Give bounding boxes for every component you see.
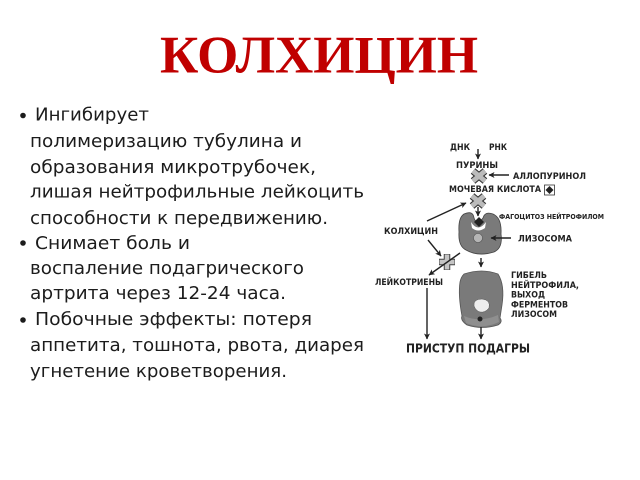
label: allopurinol: АЛЛОПУРИНОЛ bbox=[513, 172, 586, 182]
bullet 3: угнетение кроветворения. bbox=[30, 361, 287, 382]
bullet 2 bbox=[20, 233, 304, 304]
label: neutrophil death: ЛИЗОСОМ bbox=[511, 310, 557, 320]
label: gout attack: ПРИСТУП ПОДАГРЫ bbox=[406, 342, 530, 356]
arrow: colchicine to cross 2 bbox=[427, 203, 466, 221]
label: neutrophil death bbox=[511, 271, 579, 320]
bullet 3: аппетита, тошнота, рвота, диарея bbox=[30, 335, 364, 356]
label: neutrophil phagocytosis: ФАГОЦИТОЗ НЕЙТРОФИЛОМ bbox=[499, 212, 604, 221]
bullet 1: лишая нейтрофильные лейкоцить bbox=[30, 182, 364, 202]
arrow: to neutrophil bbox=[477, 207, 479, 216]
text block: bullet list bbox=[20, 104, 364, 382]
label: DNA, RNA bbox=[450, 143, 508, 153]
arrow: to purines bbox=[477, 149, 479, 159]
bullet 1: образования микротрубочек, bbox=[30, 157, 316, 178]
arrow: leukotrienes to gout attack bbox=[426, 288, 428, 339]
icon: block cross 2 bbox=[472, 196, 484, 206]
label: DNA, RNA: РНК bbox=[489, 143, 508, 153]
icon: block cross 3 bbox=[439, 254, 455, 270]
neutrophil: phagocytosis bbox=[459, 213, 501, 254]
diagram: mechanism of gout attack bbox=[375, 143, 604, 356]
bullet 2: артрита через 12-24 часа. bbox=[30, 283, 286, 304]
bullet 1: полимеризацию тубулина и bbox=[30, 131, 302, 152]
arrow: colchicine to cross 3 bbox=[428, 240, 441, 256]
bullet 2: Снимает боль и bbox=[35, 233, 190, 254]
arrow: death to gout attack bbox=[480, 327, 482, 339]
title: КОЛХИЦИН bbox=[160, 26, 478, 84]
label: leukotrienes: ЛЕЙКОТРИЕНЫ bbox=[375, 276, 443, 288]
arrow: allopurinol bbox=[489, 174, 509, 176]
arrow: neutrophil to death bbox=[480, 258, 482, 267]
bullet 1: Ингибирует bbox=[35, 104, 149, 126]
neutrophil: dying cell bbox=[459, 271, 503, 328]
bullet 3: Побочные эффекты: потеря bbox=[35, 309, 312, 330]
bullet 1 bbox=[20, 104, 364, 229]
label: uric acid: МОЧЕВАЯ КИСЛОТА bbox=[449, 185, 541, 195]
icon: uric acid crystal bbox=[544, 185, 554, 195]
label: neutrophil death: ГИБЕЛЬ bbox=[511, 271, 547, 281]
bullet 2: воспаление подагрического bbox=[30, 258, 304, 279]
label: lysosome: ЛИЗОСОМА bbox=[518, 234, 572, 244]
arrow: to leukotrienes bbox=[429, 253, 460, 275]
label: DNA, RNA: ДНК bbox=[450, 143, 471, 153]
label: colchicine: КОЛХИЦИН bbox=[384, 227, 438, 237]
label: neutrophil death: НЕЙТРОФИЛА, bbox=[511, 279, 579, 291]
bullet 1: способности к передвижению. bbox=[30, 208, 328, 229]
bullet 3 bbox=[20, 309, 364, 382]
label: purines: ПУРИНЫ bbox=[456, 161, 498, 171]
arrow: lysosome bbox=[491, 237, 511, 239]
label: neutrophil death: ВЫХОД bbox=[511, 290, 545, 300]
label: neutrophil death: ФЕРМЕНТОВ bbox=[511, 300, 568, 310]
icon: block cross 1 bbox=[473, 171, 485, 181]
